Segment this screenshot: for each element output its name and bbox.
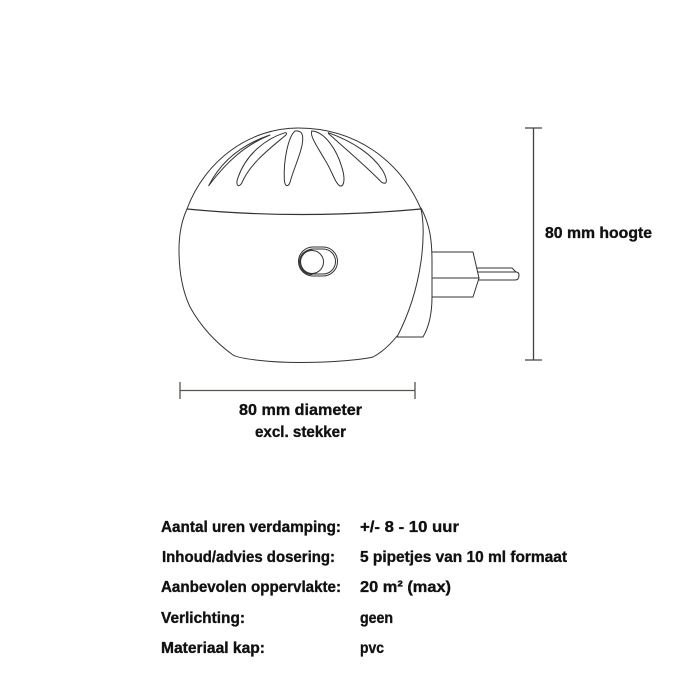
height label: 80 mm hoogte xyxy=(545,225,652,242)
row: evaporation hours: Aantal uren verdamping: xyxy=(161,519,341,536)
width dimension line xyxy=(180,382,415,399)
width label xyxy=(239,402,362,441)
power switch xyxy=(298,247,338,276)
row: lighting: Verlichting: xyxy=(161,610,245,627)
row: dosage: 5 pipetjes van 10 ml formaat xyxy=(360,549,568,566)
row: evaporation hours: +/- 8 - 10 uur xyxy=(360,519,459,536)
row: recommended surface: Aanbevolen oppervlakte: xyxy=(161,579,341,596)
row: cap material: pvc xyxy=(360,640,384,657)
diffuser body outline xyxy=(179,128,421,362)
product illustration: diffuser xyxy=(179,128,519,362)
height dimension line xyxy=(525,128,542,360)
row: dosage xyxy=(162,549,568,566)
row: lighting xyxy=(161,610,393,627)
width label: excl. stekker xyxy=(255,424,346,441)
row: recommended surface: 20 m² (max) xyxy=(360,579,451,596)
plug xyxy=(432,252,519,297)
seam between cap and base xyxy=(187,209,421,214)
width label: 80 mm diameter xyxy=(239,402,362,419)
back plate xyxy=(397,208,432,337)
row: recommended surface xyxy=(161,579,451,596)
cap vents xyxy=(209,131,386,186)
row: dosage: Inhoud/advies dosering: xyxy=(162,549,335,566)
row: cap material xyxy=(161,640,384,657)
row: cap material: Materiaal kap: xyxy=(161,640,265,657)
specification table xyxy=(161,519,568,657)
row: evaporation hours xyxy=(161,519,459,536)
row: lighting: geen xyxy=(360,610,393,627)
